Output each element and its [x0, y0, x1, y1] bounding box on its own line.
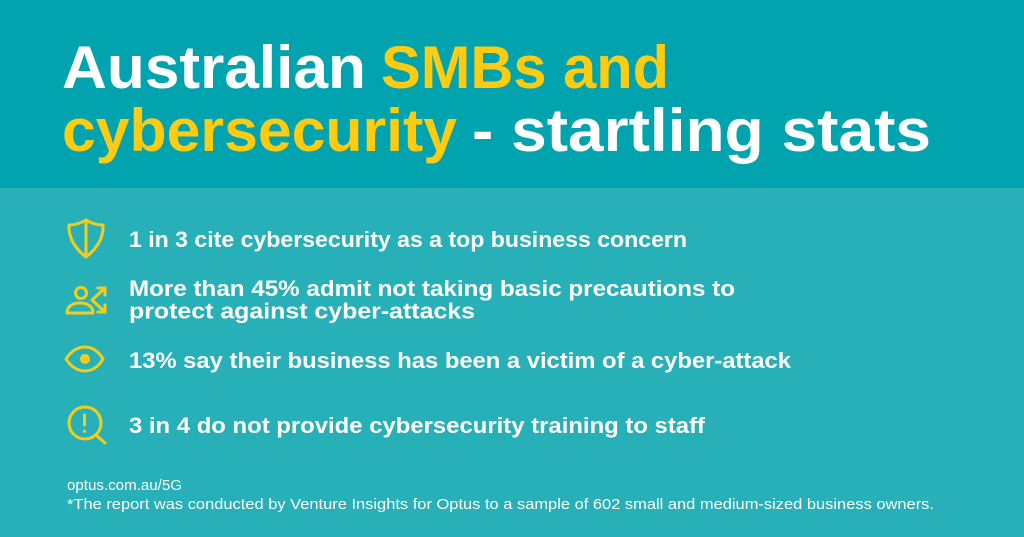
icon: eye — [66, 347, 103, 371]
title: Australian — [62, 34, 366, 101]
footnote: *The report was conducted by Venture Insights for Optus to a sample of 602 small and medium-sized business owners. — [67, 496, 934, 513]
title: cybersecurity — [62, 97, 458, 164]
title: SMBs and — [381, 34, 669, 101]
stat 4 text: 3 in 4 do not provide cybersecurity training to staff — [129, 413, 706, 438]
stat 3 text: 13% say their business has been a victim of a cyber-attack — [129, 348, 792, 373]
title — [62, 34, 931, 164]
icon: person with arrows — [67, 288, 105, 313]
stat 1 text: 1 in 3 cite cybersecurity as a top business concern — [129, 227, 687, 252]
source link: optus.com.au/5G — [67, 477, 182, 494]
icon: magnifier with exclamation mark — [69, 407, 105, 443]
stat 2 text — [129, 276, 735, 324]
icon: shield — [69, 220, 103, 257]
title: - startling stats — [472, 97, 931, 164]
panel: header background — [0, 0, 1024, 188]
stat 2 text: protect against cyber-attacks — [129, 298, 475, 324]
stat 2 text: More than 45% admit not taking basic precautions to — [129, 276, 735, 301]
